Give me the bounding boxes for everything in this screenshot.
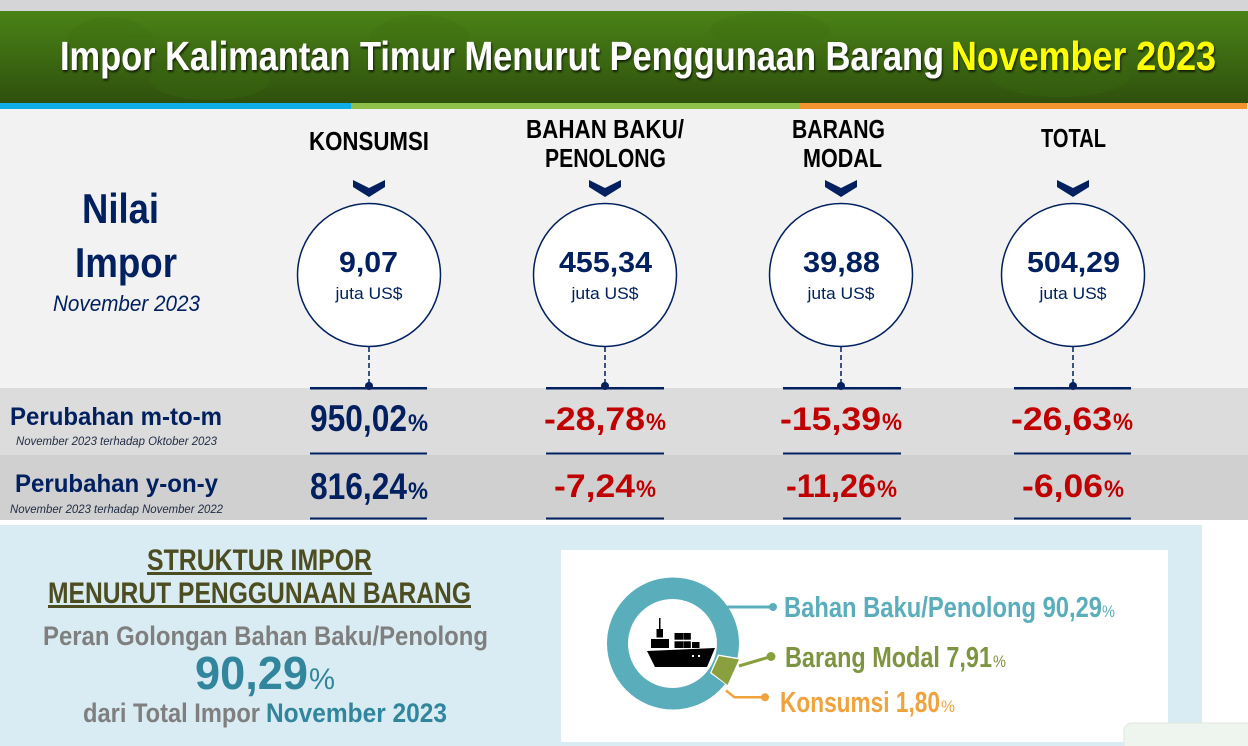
values: y-on-y: %	[408, 478, 428, 505]
values: y-on-y: -6,06	[1022, 468, 1103, 504]
panel: donut chart card	[561, 550, 1168, 742]
text block: peran golongan	[43, 621, 488, 728]
column: total: 504,29	[1027, 247, 1120, 279]
column: barang modal: 39,88	[803, 247, 880, 279]
values: m-to-m: %	[646, 409, 666, 436]
icon: cargo ship	[647, 618, 715, 667]
row label: perubahan m-to-m: Perubahan m-to-m	[10, 403, 222, 431]
column: bahan baku/penolong: 455,34	[559, 247, 652, 279]
panel: struktur impor	[0, 525, 1202, 746]
column: barang modal: BARANG	[792, 114, 885, 144]
column: bahan baku/penolong	[526, 114, 684, 390]
values: m-to-m: 950,02	[310, 398, 407, 439]
column: konsumsi	[298, 126, 440, 390]
values: m-to-m	[310, 398, 1133, 439]
values: y-on-y: %	[877, 476, 897, 503]
column: konsumsi: juta US$	[334, 284, 403, 303]
panel: nilai impor background	[0, 109, 1248, 388]
values: m-to-m: -26,63	[1011, 401, 1112, 437]
legend: bahan baku/penolong: %	[1102, 602, 1115, 621]
legend: konsumsi	[726, 687, 955, 719]
heading: nilai impor	[53, 185, 201, 316]
values: m-to-m: %	[1113, 409, 1133, 436]
text block: peran golongan: November 2023	[266, 698, 447, 728]
values: y-on-y: %	[1104, 476, 1124, 503]
row: perubahan y-on-y background	[0, 455, 1248, 520]
donut chart	[607, 578, 742, 710]
text block: peran golongan: dari Total Impor	[83, 698, 260, 728]
values: y-on-y: -7,24	[554, 468, 635, 504]
row label: perubahan m-to-m	[10, 403, 222, 448]
values: m-to-m: %	[408, 410, 428, 437]
text block: peran golongan: 90,29	[195, 647, 308, 699]
heading: nilai impor: Impor	[75, 239, 177, 286]
values: y-on-y: -11,26	[786, 468, 876, 504]
values: m-to-m: -15,39	[780, 401, 881, 437]
column: konsumsi: 9,07	[339, 247, 398, 279]
header banner	[0, 11, 1248, 109]
text block: peran golongan: Peran Golongan Bahan Baku/Penolong	[43, 621, 488, 651]
corner card	[1124, 723, 1248, 746]
legend: konsumsi: %	[941, 697, 955, 716]
heading: nilai impor: November 2023	[53, 291, 201, 316]
heading: struktur impor: MENURUT PENGGUNAAN BARANG	[48, 577, 471, 610]
values: y-on-y: 816,24	[310, 466, 407, 507]
column: bahan baku/penolong: PENOLONG	[545, 143, 666, 173]
values: m-to-m: %	[882, 409, 902, 436]
column: bahan baku/penolong: juta US$	[570, 284, 639, 303]
row label: perubahan y-on-y: Perubahan y-on-y	[15, 470, 218, 498]
column: total: juta US$	[1038, 284, 1107, 303]
heading: nilai impor: Nilai	[82, 185, 159, 232]
values: y-on-y: %	[636, 476, 656, 503]
legend: konsumsi: Konsumsi 1,80	[780, 687, 940, 719]
title: November 2023	[951, 33, 1216, 79]
title: Impor Kalimantan Timur Menurut Penggunaan Barang	[60, 33, 944, 79]
column: barang modal: juta US$	[806, 284, 875, 303]
legend: barang modal: Barang Modal 7,91	[785, 642, 992, 674]
row: perubahan m-to-m background	[0, 388, 1248, 455]
column: konsumsi: KONSUMSI	[309, 126, 429, 156]
legend: barang modal: %	[993, 652, 1006, 671]
row label: perubahan y-on-y	[10, 470, 223, 516]
column: barang modal	[770, 114, 912, 390]
column: total: TOTAL	[1041, 123, 1106, 153]
heading: struktur impor	[48, 544, 471, 610]
values: m-to-m: -28,78	[544, 401, 645, 437]
column: total	[1002, 123, 1144, 390]
heading: struktur impor: STRUKTUR IMPOR	[147, 544, 372, 577]
column: barang modal: MODAL	[803, 143, 882, 173]
values: y-on-y	[310, 466, 1124, 507]
text block: peran golongan: %	[309, 663, 335, 696]
column: bahan baku/penolong: BAHAN BAKU/	[526, 114, 684, 144]
row label: perubahan m-to-m: November 2023 terhadap Oktober 2023	[16, 434, 217, 448]
legend: bahan baku/penolong: Bahan Baku/Penolong 90,29	[784, 592, 1102, 624]
row label: perubahan y-on-y: November 2023 terhadap November 2022	[10, 502, 223, 516]
